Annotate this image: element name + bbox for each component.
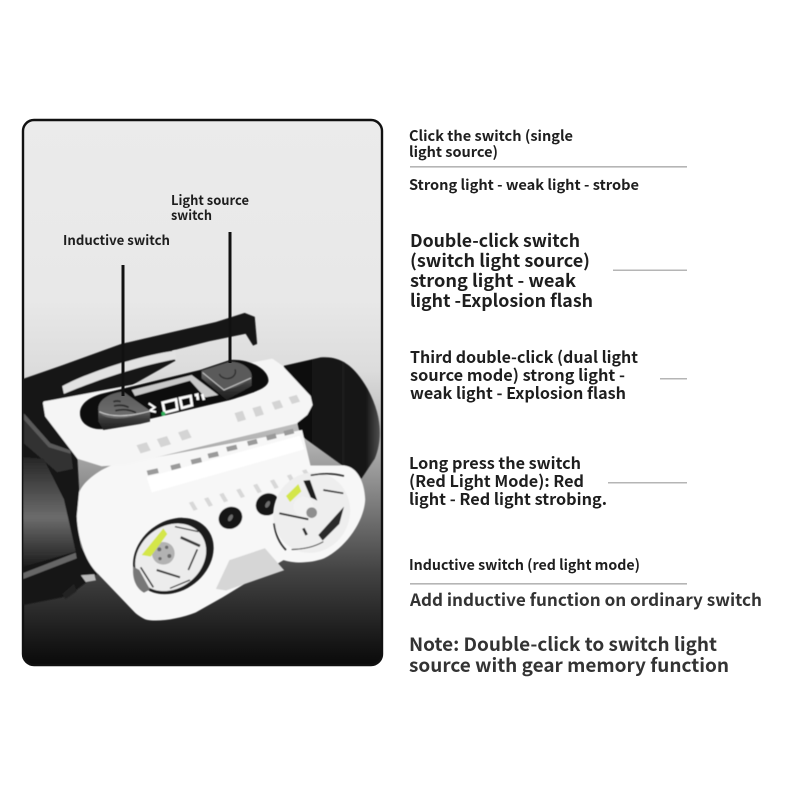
status dot: [161, 412, 165, 416]
top plate: [45, 361, 311, 464]
note: source with gear memory function: [409, 652, 729, 678]
text block: third double click: [410, 344, 687, 404]
text block: single click: [409, 125, 687, 195]
text block: double click: light -Explosion flash: [410, 288, 593, 313]
plate vents: [137, 395, 300, 453]
label: light source switch: [171, 189, 249, 224]
text block: double click: [410, 228, 687, 313]
note: Note: Double-click to switch light: [409, 631, 717, 657]
right end cap: [283, 357, 380, 479]
text block: long press: Long press the switch: [409, 450, 581, 474]
strap slot: [62, 351, 176, 394]
text block: single click: Click the switch (single: [409, 125, 573, 146]
LED: [293, 497, 313, 517]
text block: third double click: weak light - Explosion flash: [410, 380, 626, 404]
pointer line: inductive switch: [122, 265, 124, 396]
illustration: headlamp: [20, 313, 380, 621]
text block: double click: Double-click switch: [410, 228, 580, 253]
green emitter: [286, 484, 301, 502]
text block: third double click: source mode) strong light -: [410, 362, 625, 386]
right lens: [272, 472, 350, 552]
LED: [152, 542, 175, 565]
note: [409, 631, 729, 678]
text block: single click: Strong light - weak light - strobe: [409, 174, 639, 195]
smooth bar: [180, 463, 203, 470]
control pill group: [80, 360, 268, 430]
label: light source switch: Light source: [171, 189, 249, 209]
reflector streaks: [141, 527, 200, 588]
inductive switch button: [98, 408, 150, 430]
display digits: [149, 394, 204, 413]
text block: long press: (Red Light Mode): Red: [409, 468, 584, 492]
left end band: [20, 381, 98, 606]
label: inductive switch: Inductive switch: [63, 229, 170, 249]
black pill: [80, 360, 268, 429]
label: light source switch: switch: [171, 204, 212, 224]
green emitter: [142, 528, 167, 557]
reflector streaks: [318, 507, 344, 541]
inductive wave icon: [113, 401, 136, 413]
headlamp clip strap: [22, 313, 257, 401]
text block: double click: strong light - weak: [410, 268, 576, 293]
power button: [202, 371, 252, 400]
text block: inductive switch: Inductive switch (red light mode): [409, 554, 640, 575]
lamp body: [77, 430, 365, 621]
left lens: [132, 516, 214, 595]
display frame: [132, 375, 218, 397]
text block: long press: [409, 450, 687, 510]
text block: long press: light - Red light strobing.: [409, 486, 607, 510]
indicator holes: [218, 492, 278, 530]
power icon: [219, 369, 235, 379]
text block: single click: light source): [409, 141, 498, 162]
pointer line: light source switch: [228, 232, 232, 363]
text block: inductive switch: [409, 554, 762, 611]
text block: double click: (switch light source): [410, 248, 590, 273]
panel: product photo: [20, 120, 382, 665]
vent dashes under plate: [147, 429, 294, 475]
text block: inductive switch: Add inductive function on ordinary switch: [409, 586, 762, 611]
top vents: [189, 469, 311, 511]
grey rim: [133, 567, 150, 593]
sensor window: [216, 548, 284, 591]
text block: third double click: Third double-click (dual light: [410, 344, 638, 368]
